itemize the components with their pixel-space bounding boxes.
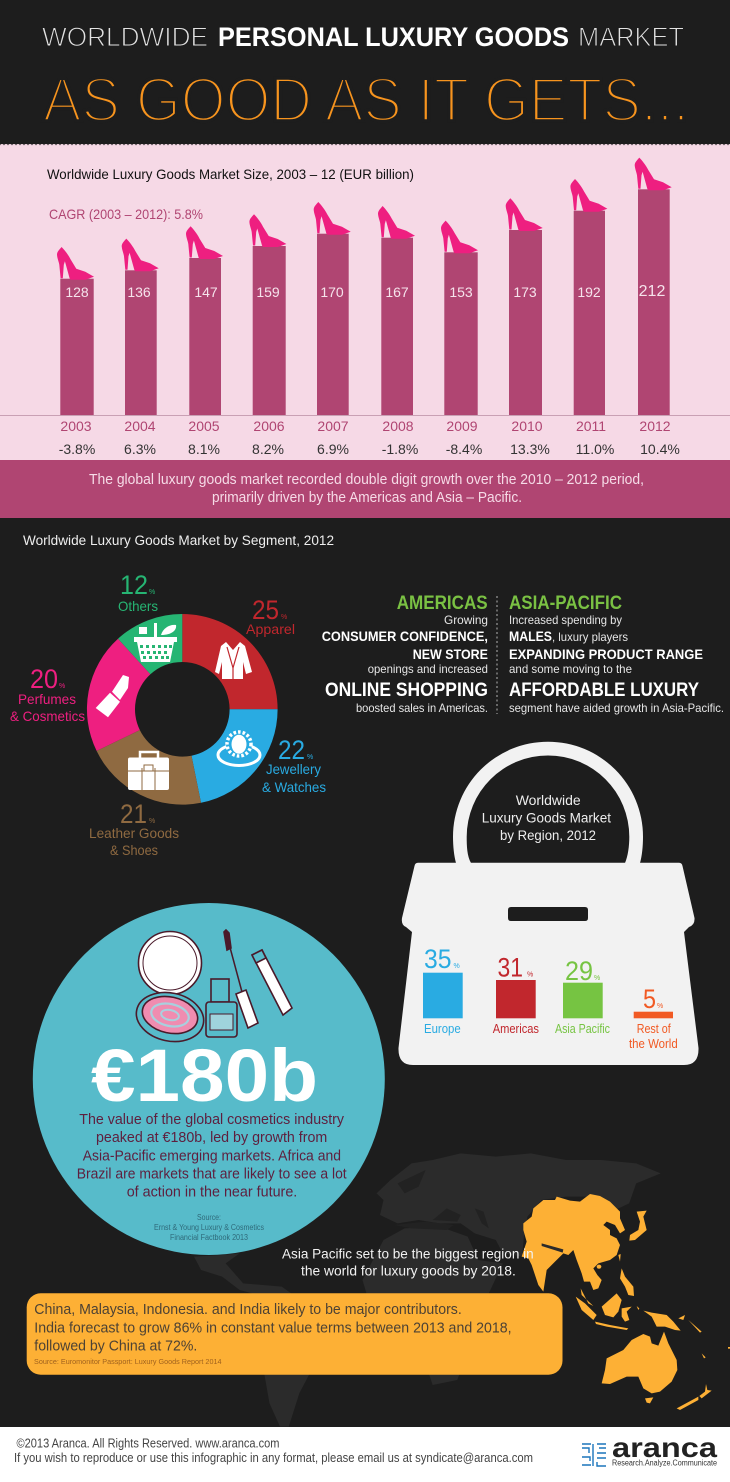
- donut label: apparel 25%: %: [281, 614, 287, 621]
- text block: asia-pacific: and some moving to the: [509, 662, 632, 676]
- text block: asia-pacific: Increased spending by: [509, 613, 622, 627]
- panel: market size bar chart: [0, 144, 730, 460]
- logo: aranca: [582, 1432, 717, 1468]
- region bar: rest of the world 5%: %: [657, 1003, 663, 1010]
- growth rates: 6.3%: [124, 441, 156, 457]
- donut label: perfumes and cosmetics 20%: %: [59, 683, 65, 690]
- title: worldwide personal luxury goods market: MARKET: [578, 22, 684, 52]
- growth rates: -1.8%: [382, 441, 418, 457]
- donut label: leather goods and shoes 21%: %: [149, 818, 155, 825]
- text block: asia-pacific: ASIA-PACIFIC: [509, 593, 622, 614]
- growth rates: 8.2%: [252, 441, 284, 457]
- region bar: rest of the world 5%: Rest of: [637, 1022, 671, 1036]
- donut label: apparel 25%: 25: [252, 595, 279, 625]
- year labels: 2005: [188, 418, 220, 434]
- region bar: asia pacific 29%: %: [594, 975, 600, 982]
- region bar: europe 35%: [423, 944, 463, 1036]
- heading: market by segment: Worldwide Luxury Goods Market by Segment, 2012: [23, 533, 334, 548]
- region bar: americas 31%: %: [527, 972, 533, 978]
- copyright text: [14, 1436, 533, 1465]
- growth rates: 6.9%: [317, 441, 349, 457]
- bar values: 128: [65, 284, 89, 300]
- cosmetics description: Asia-Pacific emerging markets. Africa and: [83, 1148, 341, 1164]
- year labels: 2010: [511, 418, 543, 434]
- icon: jacket: [215, 642, 252, 679]
- donut label: apparel 25%: [246, 595, 295, 637]
- text block: americas: AMERICAS: [397, 593, 488, 614]
- handbag title: by Region, 2012: [500, 827, 596, 843]
- donut label: leather goods and shoes 21%: [89, 799, 179, 858]
- callout band: double digit growth: [0, 460, 730, 518]
- year labels: 2009: [446, 418, 478, 434]
- region bar: americas 31%: [493, 952, 539, 1036]
- donut label: jewellery and watches 22%: Jewellery: [266, 761, 321, 777]
- region bar: asia pacific 29%: 29: [565, 956, 593, 986]
- cosmetics source: Ernst & Young Luxury & Cosmetics: [154, 1223, 264, 1232]
- text block: americas: Growing: [444, 613, 488, 627]
- logo: aranca: aranca: [612, 1432, 717, 1463]
- donut label: apparel 25%: Apparel: [246, 621, 295, 637]
- cosmetics source: Financial Factbook 2013: [170, 1233, 248, 1242]
- growth rates: 10.4%: [640, 441, 680, 457]
- region bar: asia pacific 29%: [555, 956, 610, 1036]
- donut label: perfumes and cosmetics 20%: & Cosmetics: [10, 708, 85, 724]
- cosmetics source: Source:: [197, 1213, 221, 1222]
- bar values: 170: [320, 284, 344, 300]
- bar values: 192: [577, 284, 601, 300]
- donut label: others 12%: %: [149, 589, 155, 596]
- callout: major contributors: Source: Euromonitor Passport: Luxury Goods Report 2014: [34, 1357, 222, 1366]
- donut label: jewellery and watches 22%: %: [307, 754, 313, 761]
- donut label: perfumes and cosmetics 20%: Perfumes: [18, 691, 76, 707]
- text block: americas: CONSUMER CONFIDENCE,: [322, 628, 488, 644]
- text block: americas: ONLINE SHOPPING: [325, 680, 488, 701]
- donut label: leather goods and shoes 21%: 21: [120, 799, 147, 829]
- year labels: 2003: [60, 418, 92, 434]
- world map background: [159, 1153, 661, 1427]
- region bar: rest of the world 5%: [629, 984, 678, 1051]
- year labels: 2008: [382, 418, 414, 434]
- donut label: leather goods and shoes 21%: Leather Goods: [89, 825, 179, 841]
- handbag title: Luxury Goods Market: [482, 810, 611, 826]
- donut label: jewellery and watches 22%: 22: [278, 735, 305, 765]
- bar values: 159: [256, 284, 280, 300]
- region bar: americas 31%: 31: [498, 952, 523, 982]
- donut label: jewellery and watches 22%: [262, 735, 326, 795]
- copyright text: If you wish to reproduce or use this infographic in any format, please email us at syndicate@aranca.com: [14, 1451, 533, 1465]
- callout: major contributors: China, Malaysia, Indonesia. and India likely to be major contributors.: [34, 1301, 462, 1318]
- region bar: europe 35%: 35: [424, 944, 452, 974]
- title: worldwide personal luxury goods market: WORLDWIDE: [42, 22, 208, 52]
- high heel shoes on bars: [57, 158, 672, 280]
- headline: as good as it gets: AS GOOD AS IT GETS...: [43, 66, 689, 135]
- icon: briefcase: [128, 752, 169, 790]
- donut label: others 12%: [118, 570, 158, 614]
- cosmetics description: of action in the near future.: [127, 1184, 297, 1200]
- copyright text: ©2013 Aranca. All Rights Reserved. www.aranca.com: [16, 1436, 280, 1450]
- donut label: leather goods and shoes 21%: & Shoes: [110, 842, 158, 858]
- donut label: perfumes and cosmetics 20%: 20: [30, 664, 58, 694]
- bar values: 173: [513, 284, 537, 300]
- text block: asia pacific biggest region: [282, 1246, 534, 1278]
- text block: asia pacific biggest region: the world for luxury goods by 2018.: [301, 1262, 516, 1278]
- bar values: 153: [449, 284, 473, 300]
- year labels: 2006: [253, 418, 285, 434]
- region bar: europe 35%: %: [454, 963, 460, 970]
- region bar: rest of the world 5%: the World: [629, 1037, 678, 1051]
- text block: asia-pacific: , luxury players: [552, 630, 628, 644]
- text block: americas: NEW STORE: [413, 646, 488, 662]
- growth rates: -3.8%: [59, 441, 95, 457]
- panel: cosmetics circle: [33, 903, 385, 1255]
- donut label: perfumes and cosmetics 20%: [10, 664, 85, 724]
- callout: major contributors: [27, 1293, 562, 1375]
- year labels: [60, 418, 671, 434]
- region bar: europe 35%: Europe: [424, 1022, 461, 1036]
- cagr label: CAGR (2003 – 2012): 5.8%: [49, 206, 203, 222]
- text block: asia-pacific: AFFORDABLE LUXURY: [509, 680, 699, 701]
- text block: asia-pacific: MALES: [509, 628, 552, 644]
- region bar: rest of the world 5%: 5: [643, 984, 656, 1014]
- bar values: 167: [385, 284, 409, 300]
- text block: asia pacific biggest region: Asia Pacific set to be the biggest region in: [282, 1246, 534, 1262]
- callout band: double digit growth: primarily driven by the Americas and Asia – Pacific.: [212, 490, 522, 506]
- donut label: jewellery and watches 22%: & Watches: [262, 779, 326, 795]
- year labels: 2011: [576, 418, 606, 434]
- icon: diamond ring: [218, 731, 260, 766]
- year labels: 2007: [317, 418, 349, 434]
- donut chart: segments: [87, 614, 278, 805]
- cosmetics description: Brazil are markets that are likely to see a lot: [77, 1166, 347, 1182]
- text block: americas: boosted sales in Americas.: [356, 701, 488, 715]
- growth rates: [59, 441, 680, 457]
- cosmetics source: [154, 1213, 264, 1242]
- callout: major contributors: India forecast to grow 86% in constant value terms between 2013 and 2018,: [34, 1319, 512, 1336]
- region bar: asia pacific 29%: Asia Pacific: [555, 1022, 610, 1036]
- growth rates: 11.0%: [576, 441, 614, 457]
- cosmetics description: peaked at €180b, led by growth from: [96, 1129, 327, 1146]
- panel: handbag by region: [398, 742, 699, 1065]
- bar values: 212: [639, 283, 665, 300]
- growth rates: 13.3%: [510, 441, 550, 457]
- chart title: Worldwide Luxury Goods Market Size, 2003 – 12 (EUR billion): [47, 166, 414, 182]
- text block: americas: openings and increased: [368, 662, 488, 676]
- donut label: others 12%: 12: [120, 570, 148, 600]
- bars: [60, 189, 670, 416]
- text block: asia-pacific: [509, 593, 724, 715]
- logo: aranca: Research.Analyze.Communicate: [612, 1458, 717, 1468]
- illustration: compact, nail polish and mascara: [132, 930, 292, 1048]
- big figure: 180 billion euro: €180b: [91, 1034, 318, 1117]
- growth rates: -8.4%: [446, 441, 482, 457]
- handbag title: Worldwide: [516, 792, 581, 808]
- year labels: 2004: [124, 418, 156, 434]
- callout band: double digit growth: The global luxury goods market recorded double digit growth over the 2010 – 2012 period,: [89, 472, 644, 488]
- growth rates: 8.1%: [188, 441, 220, 457]
- icon: lipstick: [96, 675, 129, 717]
- callout: major contributors: followed by China at 72%.: [34, 1338, 197, 1354]
- map: asia pacific highlighted: [522, 1194, 730, 1410]
- cosmetics description: The value of the global cosmetics industry: [79, 1111, 344, 1128]
- bar values: 147: [194, 284, 218, 300]
- text block: asia-pacific: EXPANDING PRODUCT RANGE: [509, 646, 703, 662]
- handbag title: [482, 792, 611, 843]
- bar values: [65, 283, 665, 300]
- cosmetics description: [77, 1111, 347, 1200]
- bar values: 136: [127, 284, 151, 300]
- text block: americas: [322, 593, 488, 715]
- year labels: 2012: [639, 418, 671, 434]
- donut label: others 12%: Others: [118, 598, 158, 614]
- icon: shopping basket: [134, 623, 177, 662]
- title: worldwide personal luxury goods market: PERSONAL LUXURY GOODS: [218, 22, 569, 52]
- footer: [0, 1427, 730, 1482]
- region bar: americas 31%: Americas: [493, 1022, 539, 1036]
- title: worldwide personal luxury goods market: [42, 22, 684, 52]
